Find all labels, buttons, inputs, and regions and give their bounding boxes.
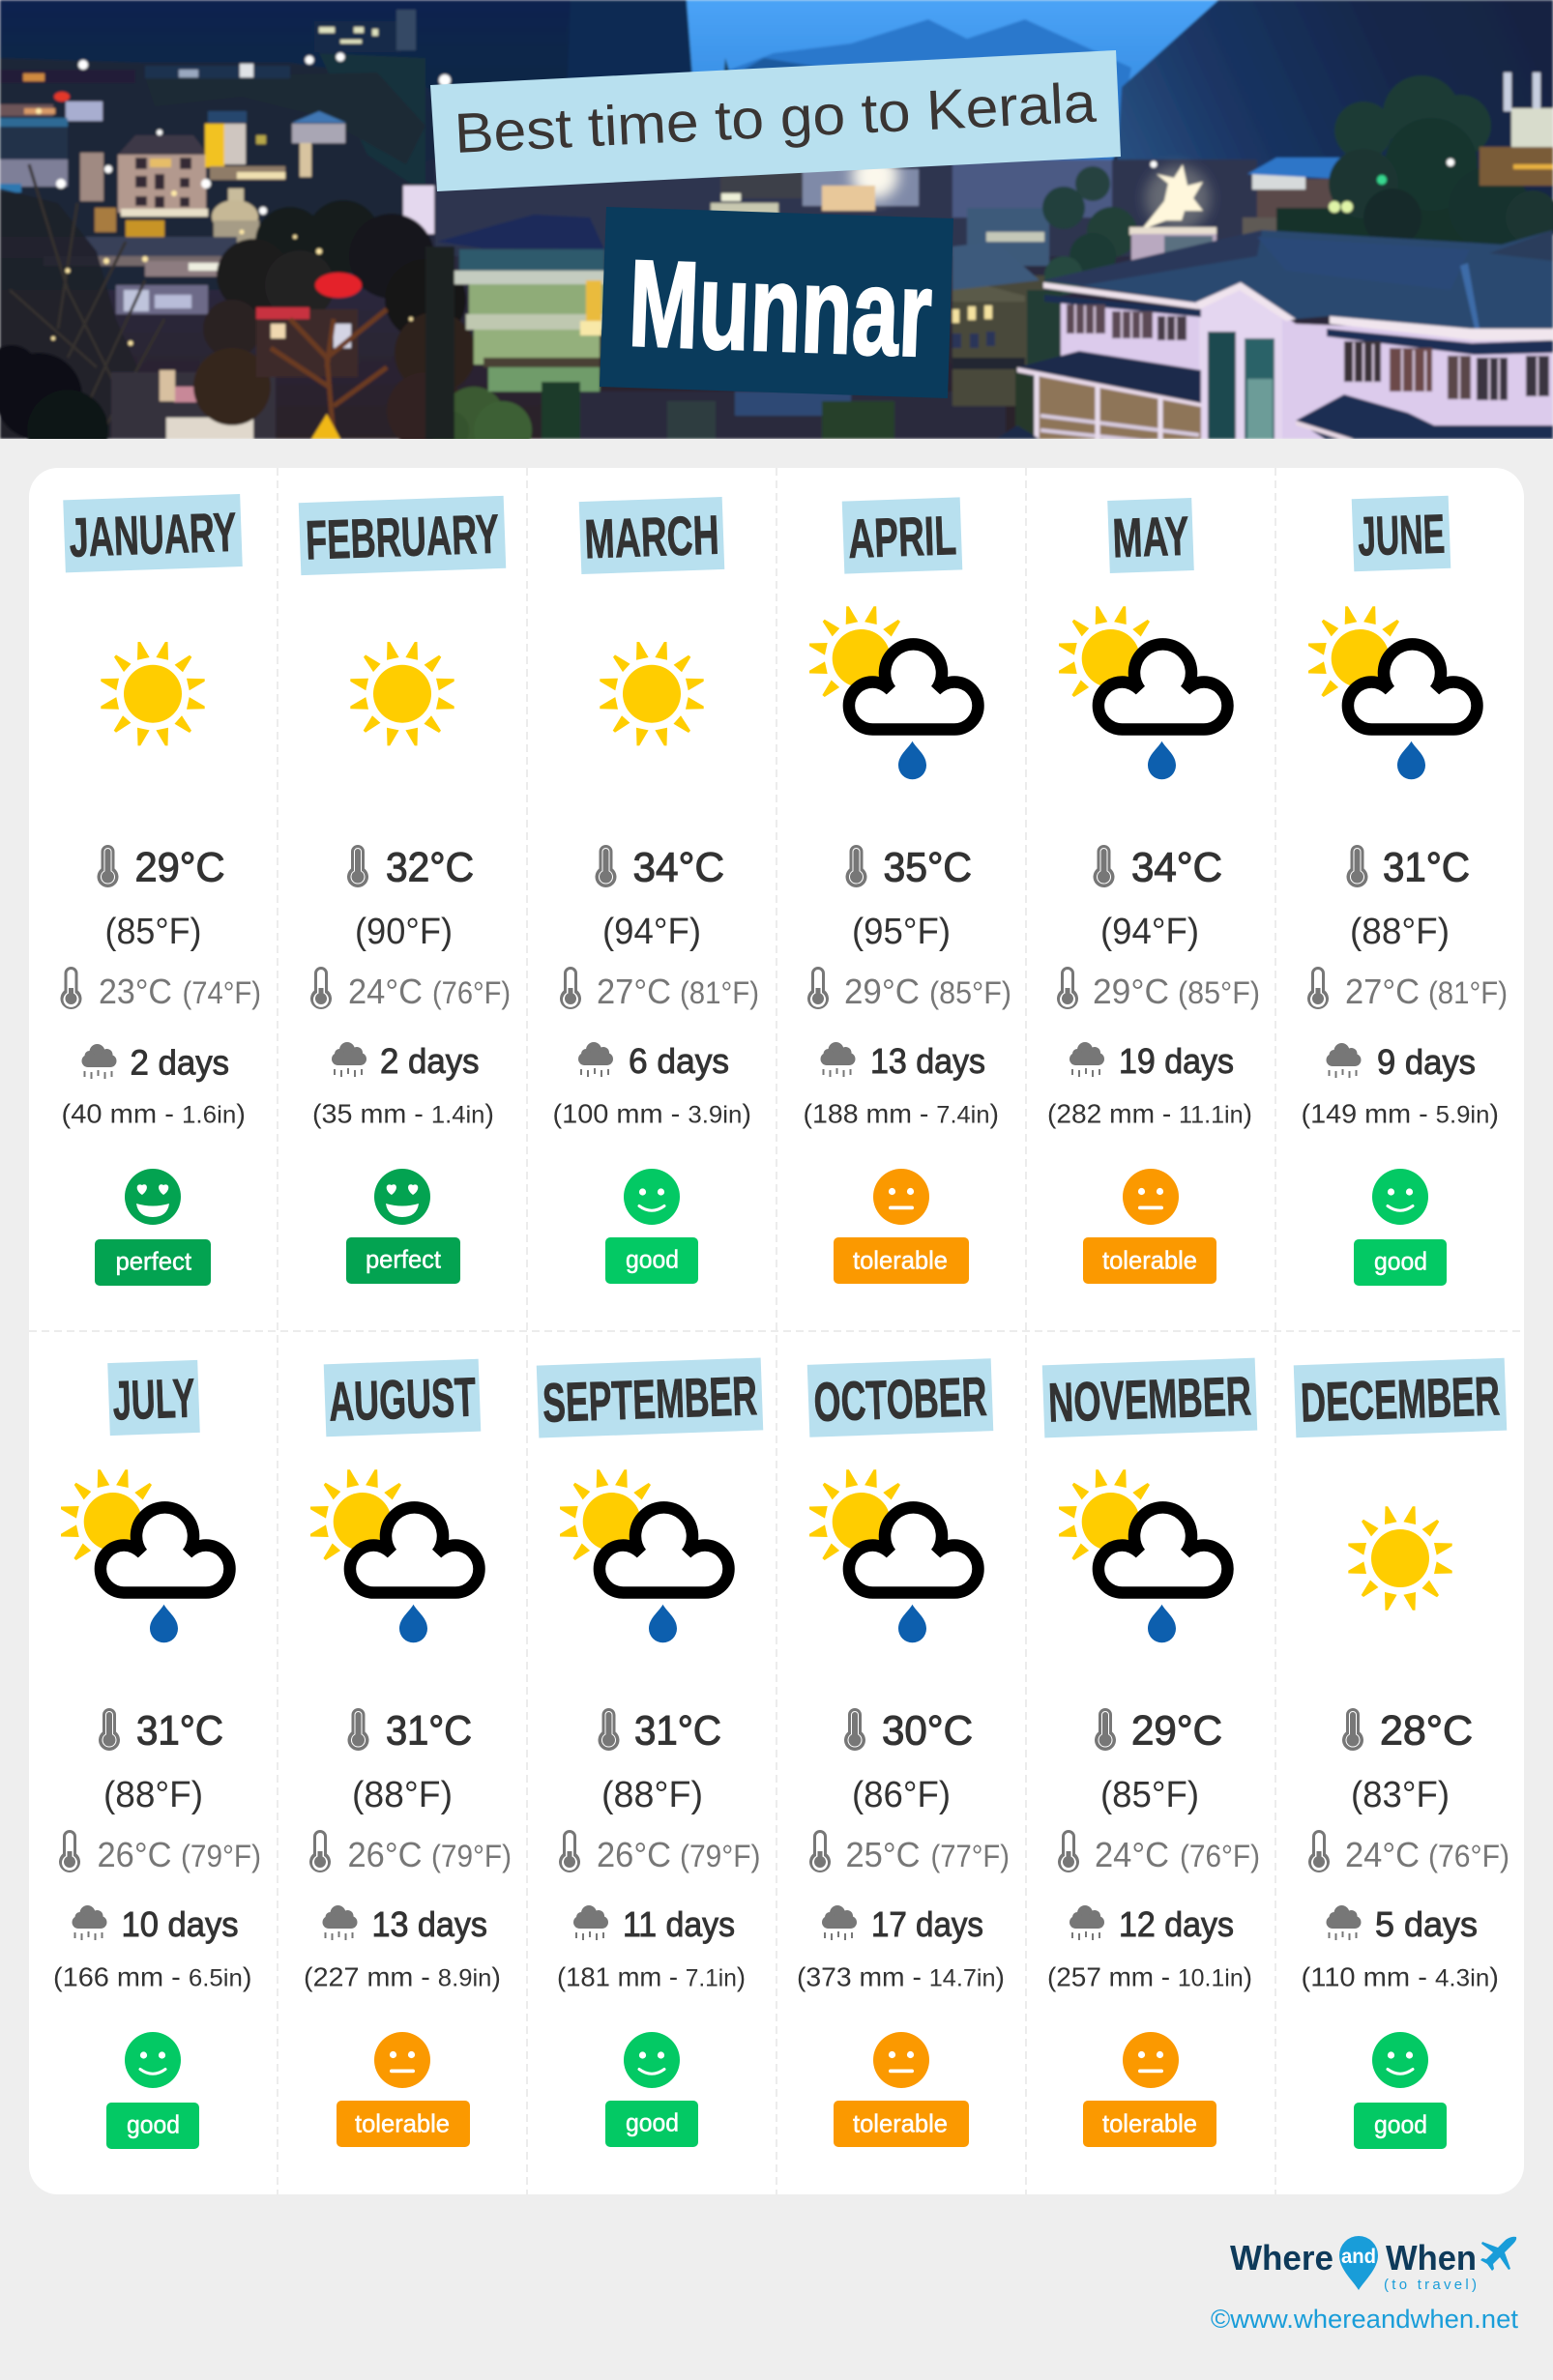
- icon: low temperature thermometer: [560, 967, 581, 1009]
- low temperature: [97, 1835, 261, 1874]
- white house: walls: [1061, 285, 1553, 439]
- rainy days: 13 days: [371, 1904, 487, 1944]
- icon: rain cloud: [1070, 1905, 1104, 1940]
- rating badge: tolerable: [1083, 1237, 1216, 1284]
- low temperature: (79°F): [181, 1839, 261, 1873]
- rainy days: 13 days: [870, 1041, 985, 1081]
- logo: Where and When: and: [1341, 2246, 1376, 2268]
- low temperature: (85°F): [929, 975, 1011, 1010]
- high temperature: 31°C: [634, 1708, 721, 1755]
- heading: August: AUGUST: [328, 1366, 477, 1434]
- high temperature: 29°C: [135, 845, 224, 891]
- panel: white calendar card: [29, 468, 1524, 2194]
- left dark foliage and branches: [0, 188, 132, 439]
- low temperature: [1095, 1835, 1260, 1874]
- lower verandah: [1036, 377, 1201, 439]
- icon: sun, cloud and rain: [310, 1469, 479, 1642]
- icon: tolerable face: [1123, 2032, 1179, 2088]
- banner: Best time to go to Kerala: Best time to go to Kerala: [453, 72, 1099, 165]
- central building: [425, 247, 454, 440]
- rating badge: tolerable: [1083, 2101, 1216, 2147]
- rating badge: good: good: [1374, 2109, 1427, 2138]
- rating badge: perfect: perfect: [116, 1246, 192, 1275]
- rating badge: tolerable: [834, 1237, 969, 1284]
- icon: good face: [125, 2032, 181, 2088]
- heading: January: JANUARY: [69, 502, 238, 569]
- heading: October: OCTOBER: [813, 1366, 988, 1434]
- website credit: ©www.whereandwhen.net: [1211, 2305, 1518, 2334]
- high temperature: 28°C: [1380, 1708, 1473, 1755]
- rating badge: good: [1354, 1239, 1447, 1286]
- low temperature: (81°F): [680, 975, 759, 1010]
- high temperature fahrenheit: (90°F): [355, 912, 453, 952]
- low temperature: (79°F): [680, 1839, 760, 1873]
- small glowing lights: [56, 74, 1157, 215]
- panel: September: [537, 1357, 763, 2147]
- low temperature: 24°C: [1345, 1835, 1420, 1874]
- rating badge: tolerable: tolerable: [1102, 1245, 1197, 1274]
- icon: low temperature thermometer: [1058, 1830, 1079, 1872]
- heading: November: NOVEMBER: [1047, 1365, 1252, 1435]
- icon: low temperature thermometer: [559, 1830, 580, 1872]
- star monument: [1145, 165, 1211, 231]
- icon: low temperature thermometer: [809, 1830, 831, 1872]
- icon: high temperature thermometer: [347, 845, 368, 887]
- icon: high temperature thermometer: [844, 1708, 865, 1751]
- icon: good face: [1372, 2032, 1428, 2088]
- title: Munnar: Munnar: [627, 234, 934, 382]
- logo: Where and When: (to travel): [1384, 2277, 1477, 2293]
- rainfall: (373 mm - 14.7in): [797, 1962, 1005, 1992]
- heading: July: [107, 1360, 200, 1436]
- header photo: Munnar town at dusk: [0, 0, 1553, 471]
- icon: rain cloud: [72, 1905, 106, 1940]
- high temperature fahrenheit: (83°F): [1351, 1775, 1450, 1815]
- icon: high temperature thermometer: [1346, 845, 1367, 887]
- icon: high temperature thermometer: [845, 845, 866, 887]
- right hilltop houses and dense trees: [1255, 178, 1334, 218]
- icon: rain cloud: [1327, 1905, 1362, 1940]
- rating badge: tolerable: [337, 2101, 470, 2147]
- rating badge: good: [605, 2101, 698, 2147]
- heading: July: JULY: [111, 1368, 196, 1432]
- low temperature: [348, 1835, 512, 1874]
- rating badge: good: good: [1374, 1246, 1427, 1275]
- rainy days: 5 days: [1375, 1904, 1478, 1944]
- heading: May: [1107, 498, 1194, 573]
- icon: rain cloud: [1327, 1043, 1362, 1078]
- high temperature: 30°C: [882, 1708, 973, 1755]
- icon: high temperature thermometer: [97, 845, 118, 887]
- low temperature: [597, 972, 759, 1011]
- high temperature: 29°C: [1131, 1708, 1222, 1755]
- heading: May: MAY: [1111, 506, 1190, 569]
- rainfall: (40 mm - 1.6in): [62, 1099, 246, 1129]
- heading: February: [299, 496, 506, 575]
- panel: January: [60, 494, 261, 1286]
- rainfall: (100 mm - 3.9in): [553, 1099, 751, 1129]
- evening trees by the star: [1075, 166, 1110, 201]
- icon: sun: [101, 642, 205, 745]
- low temperature: (76°F): [1428, 1839, 1509, 1873]
- rating badge: good: good: [626, 2107, 679, 2136]
- low temperature: 23°C: [99, 972, 172, 1011]
- rating badge: tolerable: tolerable: [853, 1245, 948, 1274]
- glass panels: [1208, 332, 1236, 439]
- icon: sun, cloud and rain: [809, 1469, 978, 1642]
- rainy days: 6 days: [629, 1041, 729, 1081]
- rainy days: 17 days: [871, 1904, 983, 1944]
- bottom left street: [111, 372, 276, 439]
- icon: rain cloud: [578, 1042, 613, 1077]
- rating badge: perfect: [95, 1239, 211, 1286]
- panel: December: [1294, 1358, 1509, 2149]
- rating badge: perfect: [346, 1237, 460, 1284]
- high temperature: 31°C: [386, 1708, 472, 1755]
- rainfall: (110 mm - 4.3in): [1302, 1962, 1499, 1992]
- low temperature: 24°C: [1095, 1835, 1169, 1874]
- high temperature: 34°C: [632, 845, 724, 891]
- heading: February: FEBRUARY: [305, 504, 500, 571]
- rainfall: (166 mm - 6.5in): [53, 1962, 251, 1992]
- panel: July: [53, 1360, 261, 2149]
- high temperature: 31°C: [136, 1708, 223, 1755]
- banner: Best time to go to Kerala: [430, 50, 1121, 191]
- icon: sun, cloud and rain: [1059, 1469, 1227, 1642]
- icon: sun, cloud and rain: [1059, 606, 1227, 779]
- low temperature: [348, 972, 511, 1011]
- panel: May: [1047, 498, 1260, 1284]
- low temperature: 26°C: [348, 1835, 422, 1874]
- rating badge: good: [605, 1237, 698, 1284]
- icon: high temperature thermometer: [99, 1708, 120, 1751]
- panel: November: [1042, 1358, 1260, 2147]
- heading: January: [63, 494, 243, 572]
- icon: low temperature thermometer: [59, 1830, 80, 1872]
- icon: rain cloud: [820, 1042, 855, 1077]
- rating badge: good: [1354, 2103, 1447, 2149]
- heading: March: [579, 497, 724, 574]
- rainy days: 2 days: [380, 1041, 480, 1081]
- icon: sun, cloud and rain: [560, 1469, 728, 1642]
- low temperature: (85°F): [1178, 975, 1260, 1010]
- low temperature: 25°C: [845, 1835, 921, 1874]
- icon: sun, cloud and rain: [61, 1469, 229, 1642]
- icon: rain cloud: [81, 1044, 116, 1079]
- icon: sun, cloud and rain: [1308, 606, 1477, 779]
- right side buildings: [952, 276, 1044, 406]
- low temperature: 29°C: [1093, 972, 1169, 1011]
- rainy days: 2 days: [130, 1043, 229, 1083]
- lit buildings: [118, 135, 208, 155]
- high temperature fahrenheit: (88°F): [601, 1775, 703, 1815]
- heading: November: [1042, 1358, 1257, 1437]
- low temperature: (81°F): [1428, 975, 1508, 1010]
- panel: August: [304, 1359, 512, 2147]
- low temperature: 27°C: [597, 972, 671, 1011]
- high temperature: 34°C: [1131, 845, 1222, 891]
- rainfall: (181 mm - 7.1in): [557, 1962, 746, 1992]
- high temperature fahrenheit: (88°F): [1350, 912, 1450, 952]
- central tree: [253, 207, 313, 255]
- rainfall: (35 mm - 1.4in): [312, 1099, 494, 1129]
- icon: tolerable face: [1123, 1169, 1179, 1225]
- heading: June: [1352, 496, 1450, 571]
- high temperature fahrenheit: (85°F): [1100, 1775, 1199, 1815]
- panel: October: [797, 1358, 1010, 2147]
- icon: low temperature thermometer: [309, 1830, 331, 1872]
- heading: August: [324, 1359, 481, 1437]
- high temperature: 31°C: [1383, 845, 1470, 891]
- icon: tolerable face: [374, 2032, 430, 2088]
- panel: April: [803, 497, 1011, 1284]
- rainfall: (282 mm - 11.1in): [1047, 1099, 1252, 1129]
- icon: good face: [624, 2032, 680, 2088]
- icon: rain cloud: [332, 1042, 366, 1077]
- low temperature: 26°C: [597, 1835, 671, 1874]
- heading: March: MARCH: [583, 505, 720, 570]
- left hillside: [0, 58, 425, 290]
- mid-lower left streets: [85, 236, 238, 257]
- rainfall: (227 mm - 8.9in): [304, 1962, 501, 1992]
- high temperature: 35°C: [884, 845, 972, 891]
- icon: perfect face: [125, 1169, 181, 1225]
- title: Munnar: [600, 207, 953, 398]
- icon: high temperature thermometer: [1093, 845, 1114, 887]
- windows: [1067, 305, 1105, 334]
- rating badge: tolerable: tolerable: [853, 2108, 948, 2137]
- low temperature: [844, 972, 1011, 1011]
- logo: Where and When: [1230, 2236, 1516, 2293]
- icon: good face: [1372, 1169, 1428, 1225]
- heading: April: [842, 497, 962, 574]
- icon: high temperature thermometer: [1095, 1708, 1116, 1751]
- icon: rain cloud: [573, 1905, 608, 1940]
- low temperature: (76°F): [432, 975, 511, 1010]
- high temperature fahrenheit: (88°F): [103, 1775, 203, 1815]
- low temperature: 24°C: [348, 972, 423, 1011]
- icon: low temperature thermometer: [1307, 967, 1329, 1009]
- icon: high temperature thermometer: [1342, 1708, 1363, 1751]
- icon: sun: [1348, 1506, 1452, 1611]
- panel: March: [553, 497, 759, 1284]
- panel: February: [299, 496, 511, 1284]
- heading: October: [807, 1358, 993, 1437]
- high temperature fahrenheit: (95°F): [852, 912, 951, 952]
- icon: tolerable face: [873, 2032, 929, 2088]
- low temperature: (76°F): [1180, 1839, 1260, 1873]
- logo: Where and When: Where: [1230, 2238, 1333, 2278]
- rainfall: (149 mm - 5.9in): [1302, 1099, 1499, 1129]
- low temperature: (77°F): [930, 1839, 1010, 1873]
- rating badge: perfect: perfect: [366, 1245, 442, 1274]
- rating badge: good: good: [626, 1245, 679, 1274]
- rainfall: (257 mm - 10.1in): [1047, 1962, 1252, 1992]
- rating badge: good: good: [127, 2109, 180, 2138]
- high temperature fahrenheit: (88°F): [352, 1775, 453, 1815]
- icon: high temperature thermometer: [598, 1708, 619, 1751]
- billboard and statue: [403, 186, 434, 234]
- heading: June: JUNE: [1357, 503, 1446, 568]
- icon: rain cloud: [323, 1905, 358, 1940]
- low temperature: [597, 1835, 760, 1874]
- low temperature: [1093, 972, 1260, 1011]
- icon: rain cloud: [1070, 1042, 1104, 1077]
- icon: rain cloud: [822, 1905, 857, 1940]
- icon: good face: [624, 1169, 680, 1225]
- rating badge: tolerable: [834, 2101, 969, 2147]
- heading: September: SEPTEMBER: [542, 1365, 758, 1435]
- rating badge: good: [106, 2103, 199, 2149]
- rating badge: tolerable: tolerable: [355, 2108, 450, 2137]
- low temperature: (74°F): [182, 975, 261, 1010]
- low temperature: 27°C: [1345, 972, 1420, 1011]
- rainy days: 11 days: [623, 1904, 735, 1944]
- rainy days: 19 days: [1119, 1041, 1234, 1081]
- rainy days: 9 days: [1377, 1042, 1476, 1082]
- low temperature: [845, 1835, 1010, 1874]
- icon: sun: [350, 642, 454, 745]
- heading: April: APRIL: [847, 505, 957, 570]
- low temperature: 26°C: [97, 1835, 172, 1874]
- low temperature: 29°C: [844, 972, 920, 1011]
- logo: Where and When: When: [1386, 2238, 1477, 2278]
- icon: low temperature thermometer: [1057, 967, 1078, 1009]
- icon: low temperature thermometer: [310, 967, 332, 1009]
- distant mid town: [435, 160, 1257, 256]
- roof: [1043, 230, 1553, 329]
- hill church: [1504, 73, 1511, 111]
- icon: low temperature thermometer: [1308, 1830, 1330, 1872]
- low temperature: [1345, 972, 1508, 1011]
- high temperature fahrenheit: (94°F): [1100, 912, 1199, 952]
- panel: June: [1302, 496, 1508, 1286]
- icon: tolerable face: [873, 1169, 929, 1225]
- icon: low temperature thermometer: [60, 967, 81, 1009]
- low temperature: [99, 972, 261, 1011]
- rainfall: (188 mm - 7.4in): [803, 1099, 999, 1129]
- icon: sun: [600, 642, 704, 745]
- low temperature: [1345, 1835, 1509, 1874]
- high temperature fahrenheit: (94°F): [602, 912, 701, 952]
- icon: low temperature thermometer: [807, 967, 829, 1009]
- rainy days: 12 days: [1119, 1904, 1234, 1944]
- low temperature: (79°F): [431, 1839, 512, 1873]
- heading: September: [537, 1357, 763, 1438]
- icon: sun, cloud and rain: [809, 606, 978, 779]
- icon: perfect face: [374, 1169, 430, 1225]
- rating badge: tolerable: tolerable: [1102, 2108, 1197, 2137]
- high temperature fahrenheit: (86°F): [852, 1775, 951, 1815]
- icon: high temperature thermometer: [596, 845, 617, 887]
- high temperature: 32°C: [386, 845, 474, 891]
- icon: high temperature thermometer: [348, 1708, 369, 1751]
- dome: [228, 189, 244, 204]
- high temperature fahrenheit: (85°F): [104, 912, 201, 952]
- rainy days: 10 days: [122, 1904, 238, 1944]
